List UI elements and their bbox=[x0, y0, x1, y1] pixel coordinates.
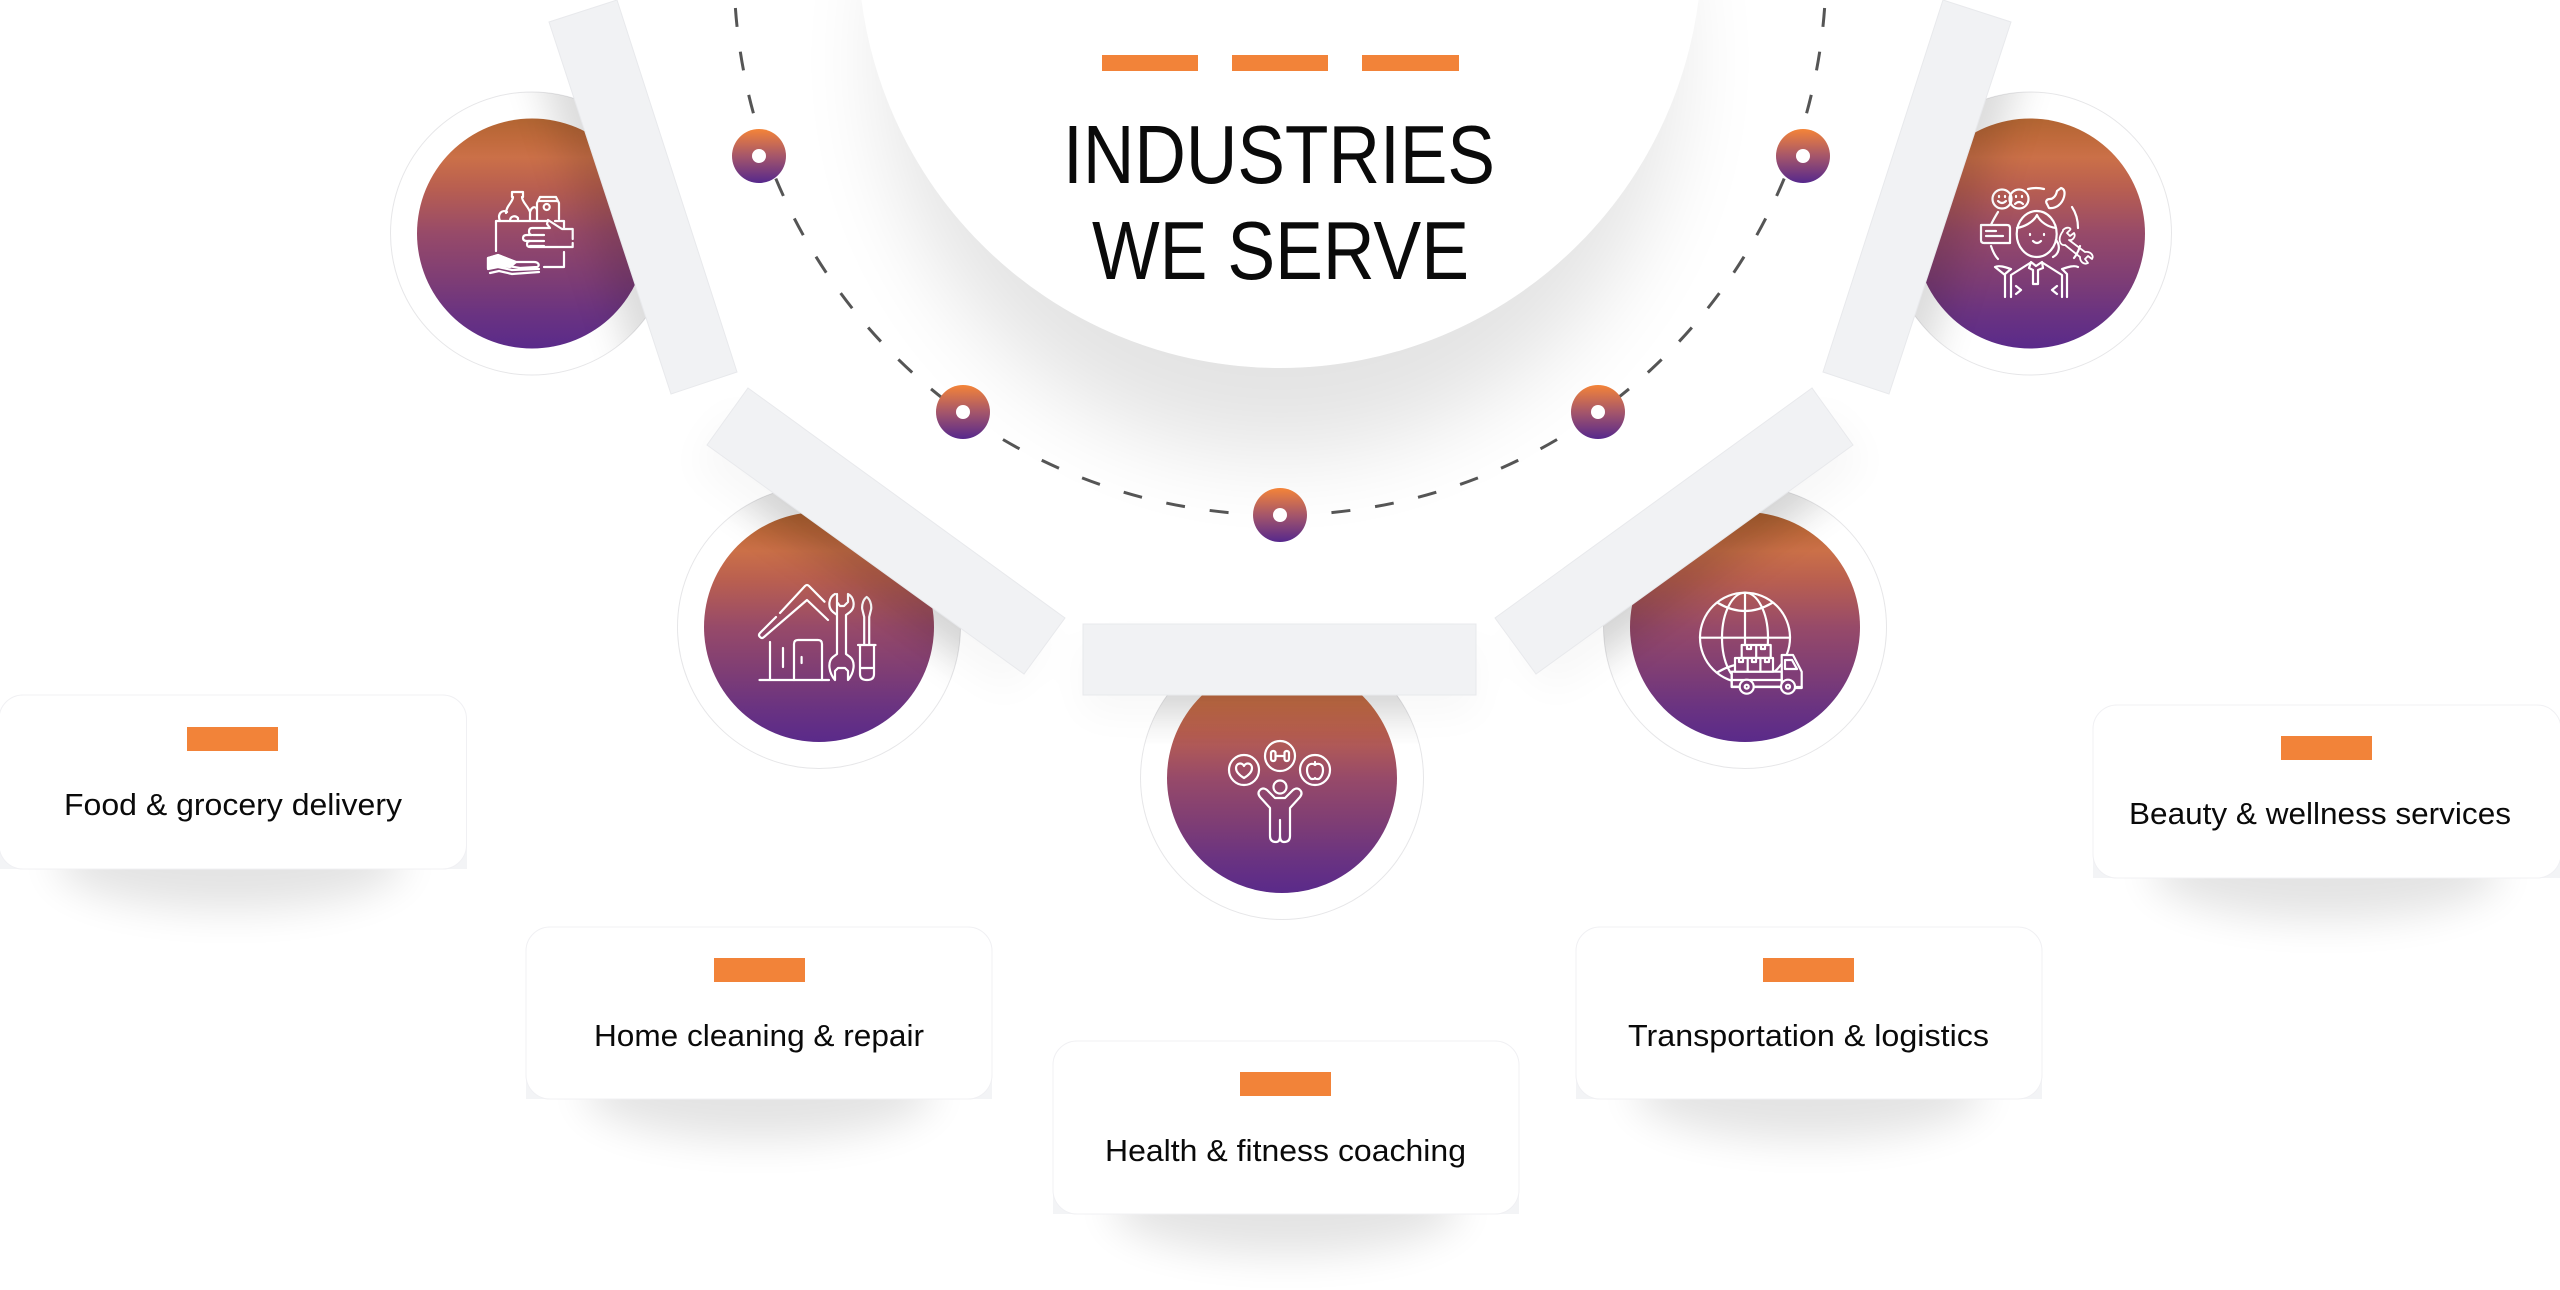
central hub shadow bbox=[885, 0, 1675, 455]
card: home cleaning & repair bbox=[526, 927, 992, 1140]
card: transportation & logistics: Transportation & logistics bbox=[1628, 1018, 1989, 1053]
band: lower right bbox=[1495, 388, 1853, 674]
central hub disc bbox=[858, 0, 1702, 368]
card: transportation & logistics bbox=[1576, 927, 2042, 1140]
home circle badge bbox=[678, 486, 960, 768]
transportation circle badge bbox=[1604, 486, 1886, 768]
dot 5 bbox=[1776, 129, 1830, 183]
timeline dots bbox=[732, 129, 1830, 542]
icon: globe and delivery truck bbox=[1700, 593, 1802, 694]
card: health & fitness coaching bbox=[1053, 1041, 1519, 1255]
dot 1 bbox=[732, 129, 786, 183]
band shadows on badges bbox=[532, 92, 2028, 728]
dot 2 bbox=[936, 385, 990, 439]
beauty circle badge bbox=[1888, 92, 2172, 375]
title accent bars bbox=[1102, 55, 1459, 71]
band: top right bbox=[1823, 0, 2011, 394]
icon: house and tools bbox=[759, 585, 876, 680]
card: beauty & wellness services: Beauty & wellness services bbox=[2129, 796, 2511, 831]
food circle badge bbox=[390, 92, 674, 375]
gear bands bbox=[549, 0, 2011, 695]
icon: grocery bag and hands bbox=[488, 192, 573, 274]
title bbox=[1063, 108, 1495, 297]
band: top left bbox=[549, 0, 737, 394]
card: home cleaning & repair: Home cleaning & repair bbox=[594, 1018, 924, 1053]
dot 3 bbox=[1253, 488, 1307, 542]
band: bottom center bbox=[1083, 624, 1476, 695]
card: beauty & wellness services bbox=[2093, 705, 2560, 920]
icon: service person with wrench and phone bbox=[1981, 188, 2093, 297]
faint band shadows on background bbox=[692, 408, 1868, 715]
health circle badge bbox=[1140, 636, 1424, 920]
card: food & grocery delivery bbox=[0, 695, 467, 910]
icon: person with heart, dumbbell and apple bbox=[1229, 741, 1330, 842]
title: WE SERVE bbox=[1092, 204, 1469, 297]
band: lower left bbox=[707, 388, 1065, 674]
dashed arc path bbox=[735, 8, 1825, 515]
card: health & fitness coaching: Health & fitness coaching bbox=[1105, 1133, 1466, 1168]
title: INDUSTRIES bbox=[1063, 108, 1495, 201]
card: food & grocery delivery: Food & grocery delivery bbox=[64, 787, 403, 822]
dot 4 bbox=[1571, 385, 1625, 439]
